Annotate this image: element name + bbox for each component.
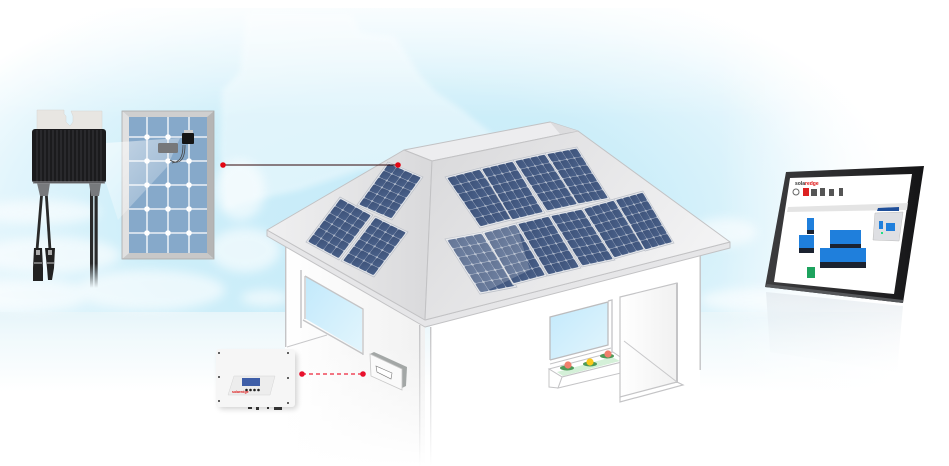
inverter bbox=[216, 349, 297, 410]
cables bbox=[37, 190, 98, 288]
cable connectors bbox=[33, 248, 55, 281]
low clouds bbox=[0, 160, 820, 312]
monitor with monitoring dashboard bbox=[765, 166, 924, 303]
solar panels: main roof bbox=[445, 147, 674, 294]
meter box on wall bbox=[370, 352, 407, 390]
solar panels: side roof bbox=[306, 162, 423, 277]
highlight beam bbox=[106, 138, 180, 220]
cable glands bbox=[37, 183, 101, 196]
solar module close-up bbox=[106, 111, 214, 259]
flowers bbox=[560, 350, 614, 370]
dashed connection: inverter to meter bbox=[299, 371, 366, 377]
roof bbox=[267, 122, 730, 327]
mounting bracket bbox=[37, 110, 102, 131]
left window bbox=[301, 270, 363, 355]
right window with flower box bbox=[549, 300, 626, 388]
dashboard panel blocks bbox=[799, 218, 866, 278]
inverter: solaredge bbox=[232, 390, 249, 394]
dashboard header bbox=[787, 181, 908, 212]
house bbox=[267, 122, 730, 466]
dashboard minimap bbox=[873, 212, 903, 241]
power optimizer bbox=[32, 110, 106, 288]
monitor reflection bbox=[766, 292, 903, 372]
dashboard header: solaredge bbox=[795, 181, 819, 187]
black body bbox=[32, 129, 106, 183]
door bbox=[620, 283, 683, 402]
house walls bbox=[270, 240, 701, 466]
screen bbox=[774, 174, 912, 294]
tall cumulus cloud bbox=[220, 14, 505, 210]
grey optimizer and junction box bbox=[158, 130, 194, 163]
connector line: panel to roof bbox=[220, 162, 401, 168]
